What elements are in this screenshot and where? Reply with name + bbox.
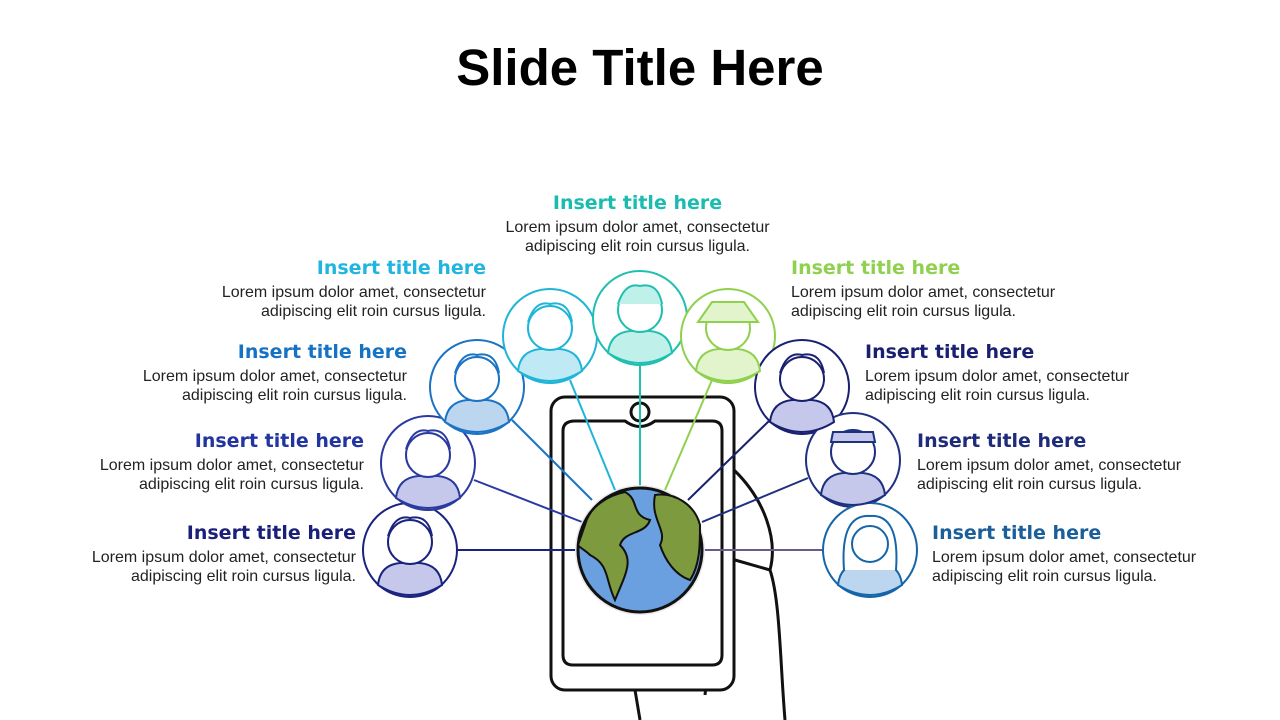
text: top: [505, 192, 770, 255]
text: top: Insert title here: [553, 192, 722, 214]
phone and hand: [551, 397, 785, 720]
text: left 3: adipiscing elit roin cursus ligula.: [139, 476, 364, 493]
text: left 4: [92, 522, 356, 585]
text: left 2: adipiscing elit roin cursus ligula.: [182, 387, 407, 404]
text: right 2: Insert title here: [865, 341, 1034, 363]
connector lines: [458, 365, 824, 550]
text: right 1: [791, 257, 1055, 320]
text: left 1: adipiscing elit roin cursus ligula.: [261, 303, 486, 320]
text: right 2: adipiscing elit roin cursus ligula.: [865, 387, 1090, 404]
text: right 3: Insert title here: [917, 430, 1086, 452]
text: right 2: Lorem ipsum dolor amet, consectetur: [865, 368, 1129, 385]
text: left 2: Insert title here: [238, 341, 407, 363]
text: left 4: adipiscing elit roin cursus ligula.: [131, 568, 356, 585]
text: right 1: adipiscing elit roin cursus ligula.: [791, 303, 1016, 320]
text: right 3: [917, 430, 1181, 493]
text: right 3: adipiscing elit roin cursus ligula.: [917, 476, 1142, 493]
text: left 3: [100, 430, 364, 493]
text: top: adipiscing elit roin cursus ligula.: [525, 238, 750, 255]
text: left 2: Lorem ipsum dolor amet, consectetur: [143, 368, 407, 385]
text: left 2: [143, 341, 407, 404]
avatar faces: [378, 285, 902, 595]
text: left 3: Insert title here: [195, 430, 364, 452]
text: left 3: Lorem ipsum dolor amet, consectetur: [100, 457, 364, 474]
text: right 1: Insert title here: [791, 257, 960, 279]
text: left 4: Insert title here: [187, 522, 356, 544]
avatar circles: [363, 271, 917, 597]
text: left 4: Lorem ipsum dolor amet, consectetur: [92, 549, 356, 566]
text: right 4: Lorem ipsum dolor amet, consectetur: [932, 549, 1196, 566]
title: Slide Title Here: [456, 39, 824, 96]
globe: [575, 485, 705, 615]
text: right 2: [865, 341, 1129, 404]
text: right 1: Lorem ipsum dolor amet, consectetur: [791, 284, 1055, 301]
text: right 4: [932, 522, 1196, 585]
text: right 4: Insert title here: [932, 522, 1101, 544]
text: left 1: [222, 257, 486, 320]
text: left 1: Insert title here: [317, 257, 486, 279]
text: top: Lorem ipsum dolor amet, consectetur: [505, 219, 770, 236]
text: left 1: Lorem ipsum dolor amet, consectetur: [222, 284, 486, 301]
text: right 3: Lorem ipsum dolor amet, consectetur: [917, 457, 1181, 474]
text: right 4: adipiscing elit roin cursus ligula.: [932, 568, 1157, 585]
